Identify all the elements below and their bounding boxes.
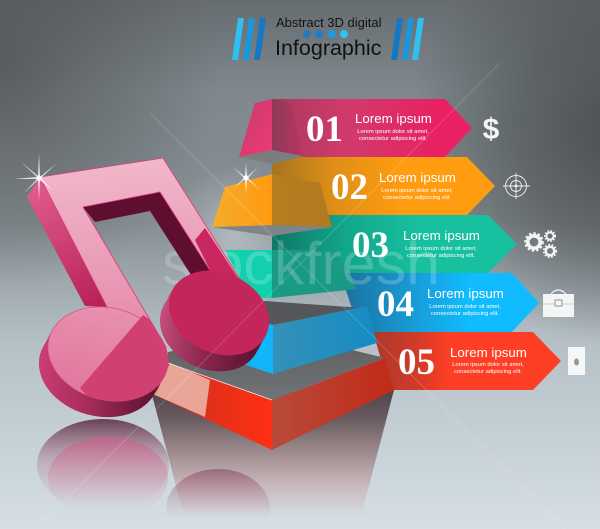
arrow banner 02: consectetur adipiscing elit.	[383, 195, 451, 201]
subtitle: Abstract 3D digital	[276, 15, 382, 30]
left stripes	[232, 18, 266, 60]
dark shine area on stem	[195, 228, 267, 322]
arrow banner 03: Lorem ipsum dolor sit amet,	[405, 246, 477, 252]
arrow banner 04: Lorem ipsum	[427, 286, 504, 301]
floor reflection	[37, 390, 394, 529]
diagonal light lines	[37, 63, 565, 529]
icon: target	[503, 173, 530, 199]
note side walls	[27, 177, 211, 307]
arrow banner 04: 04	[377, 284, 414, 325]
icon: briefcase	[543, 290, 574, 317]
arrow banner 01: Lorem ipsum	[355, 111, 432, 126]
arrow banner 05: Lorem ipsum	[450, 345, 527, 360]
heading: Infographic	[275, 36, 382, 60]
arrow banner 01: Lorem ipsum dolor sit amet,	[357, 129, 429, 135]
arrow banner 01: 01	[306, 109, 343, 150]
arrow banner 02: Lorem ipsum	[379, 170, 456, 185]
arrow banner 02: Lorem ipsum dolor sit amet,	[381, 188, 453, 194]
arrow banner 04: Lorem ipsum dolor sit amet,	[429, 304, 501, 310]
arrow banner 04: consectetur adipiscing elit.	[431, 311, 499, 317]
icon: sparkle on orange tier	[233, 162, 260, 195]
arrow banner 03	[272, 215, 517, 273]
icon: music note	[27, 158, 283, 430]
arrow banner 01: consectetur adipiscing elit.	[359, 136, 427, 142]
watermark: stockfresh	[162, 230, 440, 297]
arrow banner 04	[340, 273, 539, 332]
title	[232, 15, 424, 60]
arrow banner 01	[272, 99, 472, 157]
pyramid tier 2 orange	[212, 174, 332, 236]
arrow banner 02: 02	[331, 167, 368, 208]
arrow banner 05: Lorem ipsum dolor sit amet,	[452, 362, 524, 368]
pyramid tier 5 red	[155, 330, 394, 450]
right stripes	[391, 18, 424, 60]
arrow banner 02	[272, 157, 495, 215]
right note head extrusion	[146, 260, 280, 387]
icon: dollar: $	[483, 113, 500, 146]
note stem and beam	[40, 158, 267, 347]
icon: gears	[525, 231, 556, 257]
arrow banner 03: Lorem ipsum	[403, 228, 480, 243]
dark shine area on left head	[80, 315, 168, 401]
pyramid tier 3 green	[225, 250, 357, 298]
dots	[303, 30, 348, 38]
icon: barrel	[568, 347, 585, 375]
left note head extrusion	[28, 299, 176, 430]
arrow banner 03: 03	[352, 225, 389, 266]
right note head	[155, 255, 283, 371]
pyramid tier 4 blue	[240, 300, 377, 374]
pyramid tier 1 pink	[239, 99, 304, 164]
arrow banner 05: 05	[398, 342, 435, 383]
arrow banner 05	[373, 332, 561, 390]
arrow banner 03: consectetur adipiscing elit.	[407, 253, 475, 259]
arrow banner 05: consectetur adipiscing elit.	[454, 369, 522, 375]
icon: sparkle on note	[14, 153, 57, 200]
left note head	[37, 294, 179, 414]
